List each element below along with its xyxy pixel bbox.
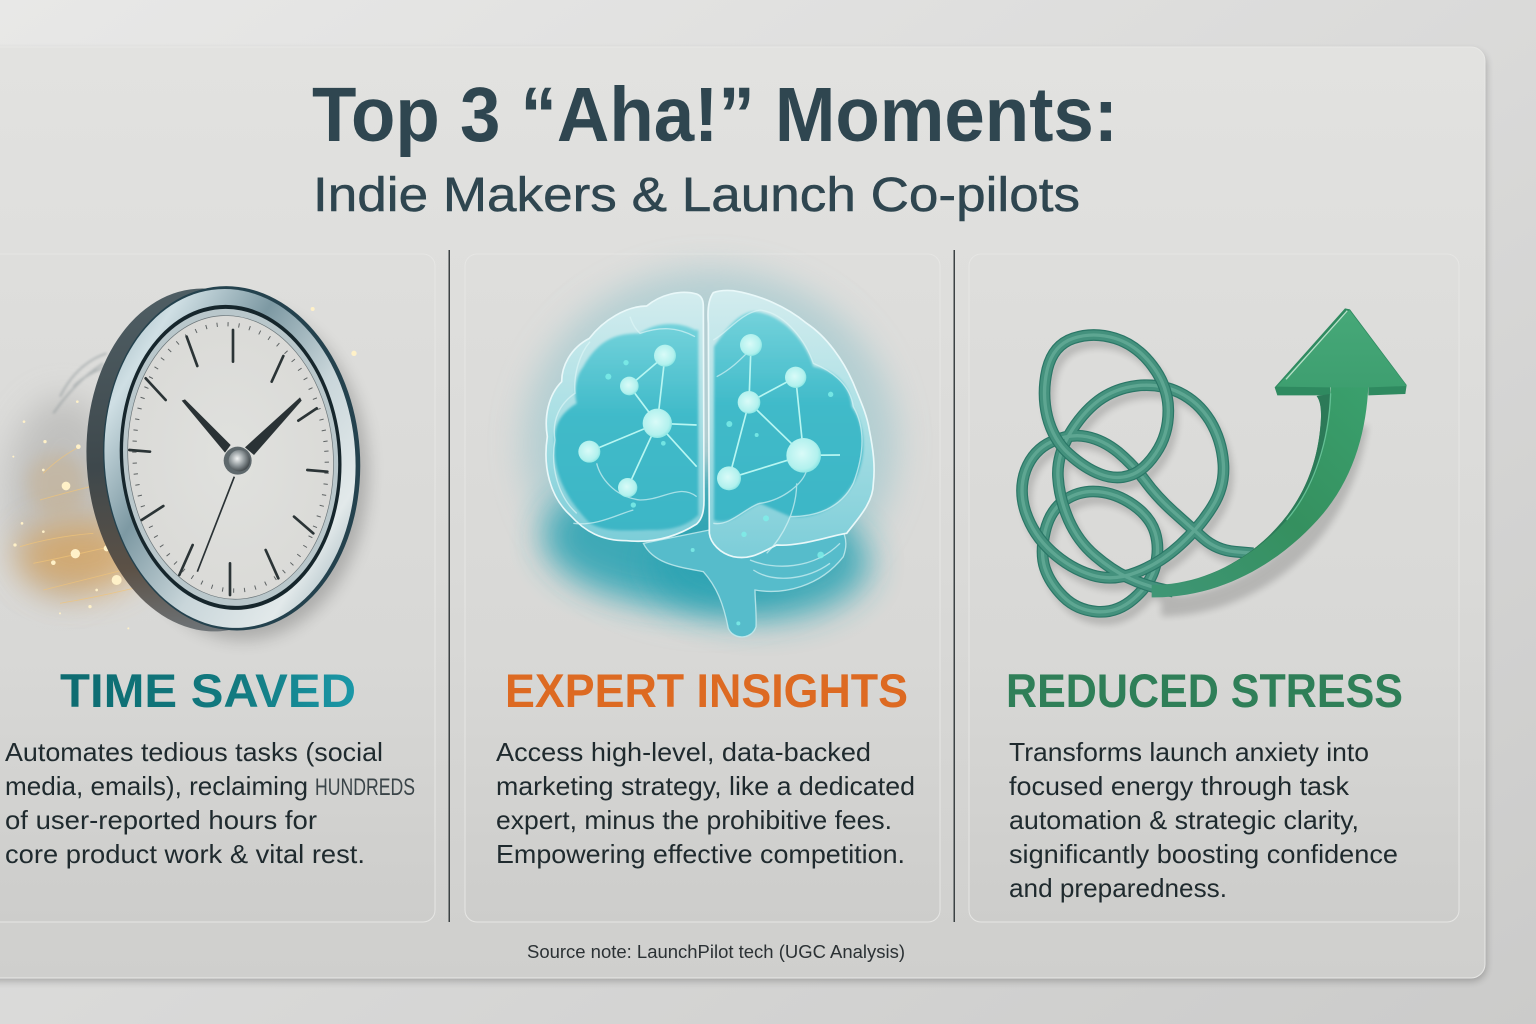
card background: reduced stress <box>969 254 1459 922</box>
panel: reduced stress <box>969 254 1459 922</box>
brain inner lobes <box>554 312 863 531</box>
text: reduced stress description: significantly boosting confidence <box>1009 839 1398 869</box>
text: reduced stress description <box>1009 737 1398 903</box>
text: expert insights description: expert, minus the prohibitive fees. <box>496 805 892 835</box>
icon: clock <box>7 277 372 640</box>
arrow shaft <box>1152 385 1368 597</box>
hour marks <box>129 330 327 595</box>
arrow shaft side band <box>1173 394 1330 585</box>
brain network <box>578 334 840 625</box>
text: time saved description <box>5 737 415 869</box>
text: time saved description: Automates tedious tasks (social <box>5 737 383 767</box>
arrow <box>1152 308 1407 597</box>
tangle: main strand <box>1022 385 1253 592</box>
heading: time saved: TIME SAVED <box>60 664 356 717</box>
arrow head face <box>1277 310 1407 387</box>
text: expert insights description: Empowering effective competition. <box>496 839 905 869</box>
source note: Source note: LaunchPilot tech (UGC Analysis) <box>527 942 905 962</box>
text: reduced stress description: Transforms launch anxiety into <box>1009 737 1369 767</box>
text: reduced stress description: automation & strategic clarity, <box>1009 805 1359 835</box>
right hemisphere <box>708 290 874 558</box>
left hemisphere <box>546 292 704 541</box>
panel: expert insights <box>465 254 940 922</box>
title: Top 3 “Aha!” Moments: <box>312 72 1118 158</box>
icon: tangle to arrow <box>1022 308 1407 620</box>
tangle: lower loop <box>1042 491 1157 612</box>
panel: time saved <box>0 254 435 922</box>
brain stem and cerebellum <box>643 527 846 637</box>
text: time saved description: HUNDREDS <box>315 774 415 801</box>
text: expert insights description <box>496 737 915 869</box>
minute ticks <box>126 318 336 597</box>
text: reduced stress description: and preparedness. <box>1009 873 1227 903</box>
clock hands <box>182 397 302 572</box>
text: time saved description: core product work & vital rest. <box>5 839 365 869</box>
heading: reduced stress: REDUCED STRESS <box>1006 664 1403 717</box>
text: expert insights description: marketing strategy, like a dedicated <box>496 771 915 801</box>
text: reduced stress description: focused energy through task <box>1009 771 1350 801</box>
divider right <box>954 250 955 922</box>
text: time saved description: of user-reported hours for <box>5 805 317 835</box>
divider left <box>448 250 450 922</box>
icon shadows <box>1027 343 1358 620</box>
tangle: top loop <box>1044 335 1168 477</box>
clock soft shadow <box>118 307 368 640</box>
brain folds <box>554 310 862 578</box>
clock case <box>75 277 372 640</box>
card background: expert insights <box>465 254 940 922</box>
card background: time saved <box>0 254 435 922</box>
brain glow <box>523 270 897 620</box>
icon: brain <box>523 270 897 637</box>
clock glow and sparks <box>7 307 357 629</box>
text: time saved description: media, emails), reclaiming <box>5 771 308 801</box>
heading: expert insights: EXPERT INSIGHTS <box>505 664 908 717</box>
arrow head underside <box>1275 308 1407 395</box>
text: expert insights description: Access high-level, data-backed <box>496 737 871 767</box>
subtitle: Indie Makers & Launch Co-pilots <box>313 169 1080 222</box>
